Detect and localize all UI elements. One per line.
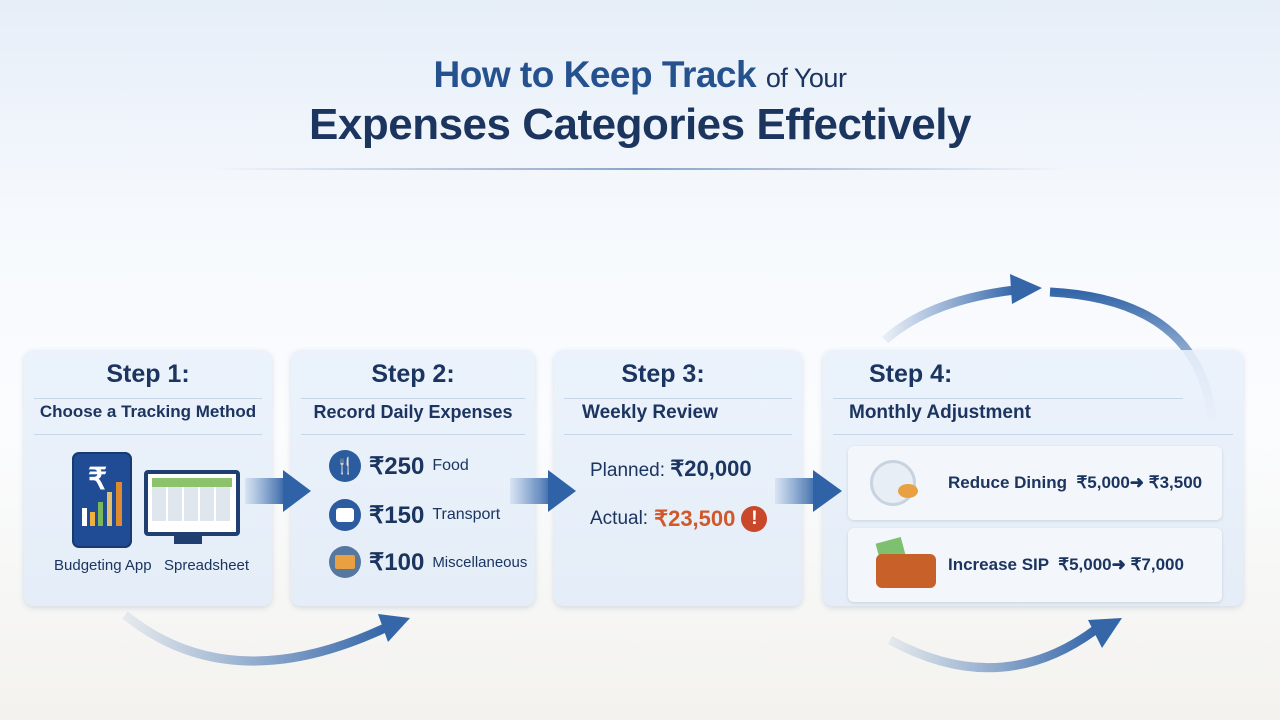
panel: step 1: Spreadsheet bbox=[164, 557, 249, 574]
card: reduce dining bbox=[848, 446, 1222, 520]
item: misc: Miscellaneous bbox=[432, 554, 527, 570]
item: food bbox=[329, 450, 469, 482]
item: transport: ₹150 bbox=[369, 502, 424, 528]
labels: Budgeting App bbox=[54, 557, 152, 574]
title: Expenses Categories Effectively bbox=[309, 100, 971, 149]
card: increase SIP bbox=[848, 528, 1222, 602]
card: reduce dining: Reduce Dining ₹5,000➜ ₹3,500 bbox=[948, 473, 1202, 492]
actual: ! bbox=[751, 508, 758, 529]
panel: step 4 bbox=[823, 350, 1243, 606]
panel: step 4: Step 4: bbox=[869, 360, 952, 388]
panel: step 3: Step 3: bbox=[621, 360, 705, 388]
panel: step 2 bbox=[291, 350, 535, 606]
item: food: Food bbox=[432, 457, 469, 474]
panel: step 4: Monthly Adjustment bbox=[849, 402, 1031, 423]
title: How to Keep Track of Your bbox=[434, 54, 846, 95]
planned: Planned: ₹20,000 bbox=[590, 456, 752, 481]
panel: step 2: Step 2: bbox=[371, 360, 455, 388]
card: increase SIP: Increase SIP ₹5,000➜ ₹7,000 bbox=[948, 555, 1184, 574]
actual: ₹23,500 bbox=[654, 506, 735, 531]
item: transport bbox=[329, 499, 500, 531]
title bbox=[309, 54, 972, 149]
actual bbox=[590, 506, 767, 532]
item: misc: ₹100 bbox=[369, 548, 424, 576]
panel: step 1: Step 1: bbox=[106, 360, 190, 388]
panel: step 3 bbox=[554, 350, 802, 606]
item: misc bbox=[329, 546, 527, 578]
item: food: 🍴 bbox=[335, 458, 355, 475]
panel: step 1 bbox=[24, 350, 272, 606]
panel: step 2: Record Daily Expenses bbox=[313, 402, 513, 422]
icon: phone app bbox=[72, 452, 132, 548]
icon: phone app: ₹ bbox=[88, 463, 107, 496]
panel: step 3: Weekly Review bbox=[582, 402, 718, 423]
item: food: ₹250 bbox=[369, 452, 424, 480]
item: transport: Transport bbox=[432, 506, 500, 523]
actual: Actual: bbox=[590, 508, 648, 529]
panel: step 1: Choose a Tracking Method bbox=[40, 402, 256, 421]
icon: spreadsheet monitor bbox=[144, 470, 240, 536]
